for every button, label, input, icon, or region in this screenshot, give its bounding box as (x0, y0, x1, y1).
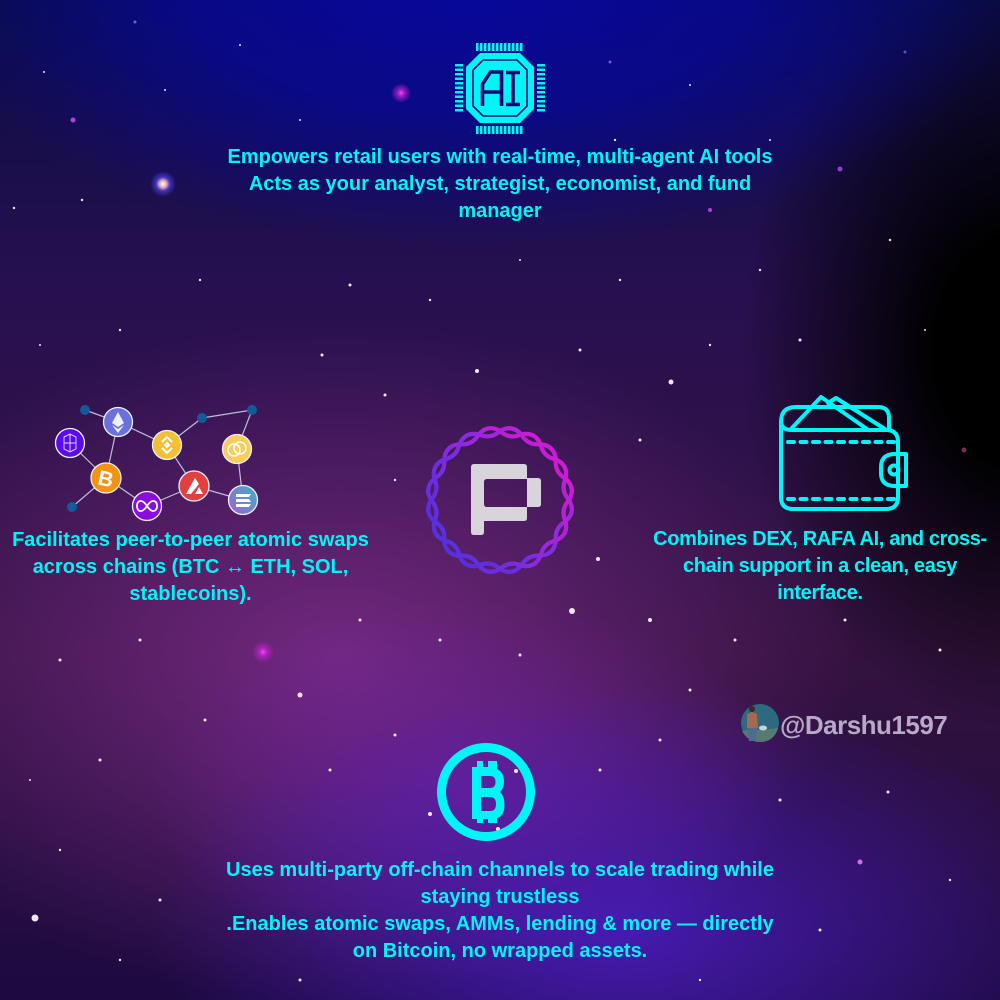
text: atomic swaps description (12, 529, 369, 605)
text: bitcoin scaling description: staying trustless (421, 886, 579, 908)
text: AI tools description: Acts as your analyst, strategist, economist, and fund (249, 173, 751, 195)
icon: ethereum glyph (112, 412, 124, 433)
icon: wallet (781, 397, 906, 509)
avatar: profile photo (741, 704, 779, 742)
text: atomic swaps description: Facilitates peer-to-peer atomic swaps (12, 529, 369, 551)
text: wallet description: interface. (777, 582, 863, 604)
icon: binance glyph (159, 437, 175, 453)
icon: solana glyph (236, 494, 251, 507)
text: atomic swaps description: across chains (BTC ↔ ETH, SOL, (33, 556, 348, 578)
text: atomic swaps description: stablecoins). (129, 583, 252, 605)
text: wallet description: Combines DEX, RAFA AI, and cross- (653, 528, 987, 550)
logo: woven ring with P mark (409, 409, 591, 591)
text: AI tools description (228, 146, 772, 222)
icon: polygon glyph (137, 501, 157, 511)
text: bitcoin scaling description: .Enables atomic swaps, AMMs, lending & more — directly (226, 913, 774, 935)
text: bitcoin scaling description (226, 859, 774, 962)
text: bitcoin scaling description: on Bitcoin, no wrapped assets. (353, 940, 647, 962)
text: bitcoin scaling description: Uses multi-party off-chain channels to scale trading while (226, 859, 774, 881)
text: AI tools description: manager (458, 200, 542, 222)
text: author handle: @Darshu1597 (780, 710, 947, 740)
icon: bitcoin in ring (442, 748, 530, 836)
icon: rings glyph (228, 442, 246, 456)
text: AI tools description: Empowers retail users with real-time, multi-agent AI tools (228, 146, 772, 168)
text: wallet description (653, 528, 987, 604)
text: wallet description: chain support in a clean, easy (683, 555, 957, 577)
icon: avalanche glyph (186, 478, 203, 494)
icon: fantom glyph (64, 434, 76, 452)
icon: crypto network (56, 405, 258, 520)
icon: AI chip (455, 43, 545, 134)
icon: bitcoin glyph: B (96, 467, 115, 492)
